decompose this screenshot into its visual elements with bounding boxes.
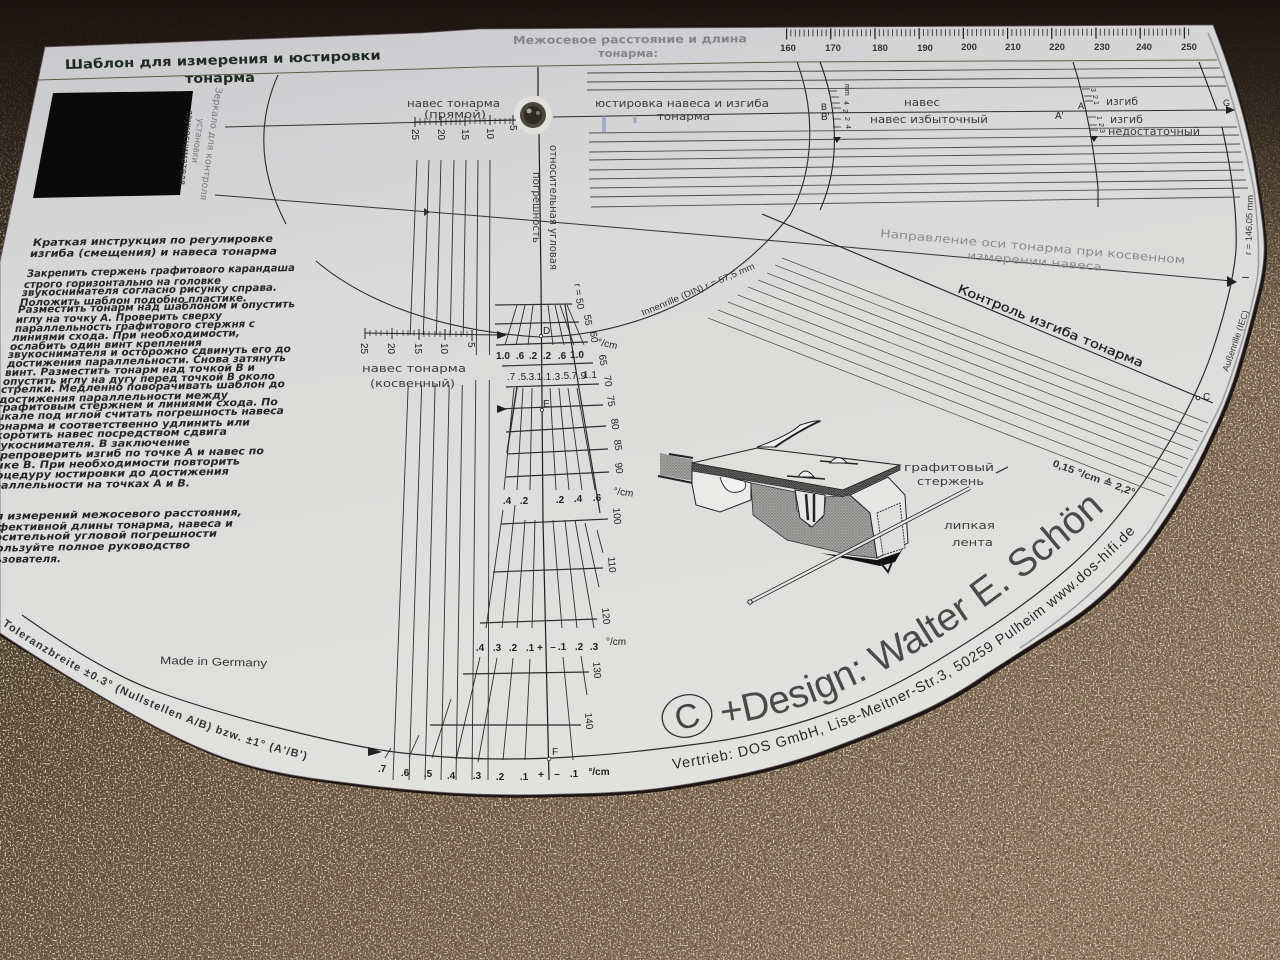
point labels and tick marks: B and A: A' [1055,111,1064,122]
point labels and tick marks: B and A: G [1223,98,1230,108]
instruction text: adjustment procedure: Положить шаблон подобно пластике. [20,292,247,309]
central scale: error values: .4 [476,643,485,654]
central scale: error rays [385,305,603,762]
direct overhang scale [407,98,518,141]
top ruler: 180 [872,43,888,54]
instruction text: adjustment procedure: шкале под иглой считать погрешность навеса [0,406,284,423]
central scale: error values: .3 [552,372,561,383]
point labels and tick marks: B and A: A [1078,101,1084,111]
deviation diagonal line with arrow [215,195,1237,287]
label: axis direction: измерении навеса [967,249,1102,274]
ink marks [604,116,635,132]
central scale: error values: – [550,642,556,653]
instruction heading: Краткая инструкция по регулировке [33,234,273,249]
bottom scale values: .1 [520,772,529,783]
main reference line with arrow G [225,106,1235,127]
instruction text: adjustment procedure [0,262,295,492]
mirror vertical caption: звукоснимателя [176,110,195,185]
central scale: error values: .1 [558,642,567,653]
point labels and tick marks: B and A: 2 [1091,95,1098,99]
label: sticky tape: лента [952,537,993,549]
instruction text: adjustment procedure: параллельность графитового стержня с [15,318,255,335]
angular error vertical label [530,145,559,270]
instruction text: adjustment procedure: графитовым стержнем и линиями схода. По [0,396,278,414]
tolerance curved text: Toleranzbreite ±0.3° (Nullstellen A/B) bzw. ±1° (A'/B') [4,618,306,762]
design credit: C [670,695,704,738]
direct overhang scale: 15 [459,129,470,141]
point labels and tick marks: B and A: mm [843,84,850,96]
mirror vertical caption: Зеркало для контроля [197,87,224,201]
instruction text: adjustment procedure: опустить иглу на дугу перед точкой В около [3,371,275,388]
mirror vertical caption [176,87,224,201]
instruction text: adjustment procedure: Закрепить стержень графитового карандаша [27,262,295,280]
indirect overhang scale: 10 [438,343,449,355]
top ruler: 230 [1094,42,1110,53]
central scale: radial arcs [430,304,609,725]
groove radius labels: I [1241,276,1252,279]
distributor curved text: Vertrieb: DOS GmbH, Lise-Meitner-Str.3, 50259 Pulheim www.dos-hifi.de [672,528,1134,768]
top ruler: 160 [780,43,796,54]
direct overhang scale: навес тонарма [407,98,500,110]
title: Шаблон для измерения и юстировки [65,49,381,73]
points D, E and F: D [543,326,550,337]
instruction text: adjustment procedure: достижения параллельности. Снова затянуть [6,353,286,370]
label: sticky tape: липкая [944,520,995,532]
indirect overhang scale: навес тонарма [362,363,466,375]
labels: overhang and bending: навес [904,97,940,109]
instruction text: adjustment procedure: стрелки. Медленно поворачивать шаблон до [1,378,285,396]
central scale: error values: .1 [526,643,535,654]
central scale: radius labels [571,283,634,730]
instruction text: adjustment procedure: звукоснимателя согласно рисунку справа. [21,283,277,299]
instruction text: adjustment procedure: линиями схода. При необходимости, [12,327,240,344]
central scale: error values: .2 [556,495,565,506]
central scale: radius labels: 60 [587,331,600,344]
central scale: error values: 1.1 [583,370,597,381]
indirect overhang scale: 5 [465,342,476,348]
indirect overhang scale: 20 [385,343,396,355]
instruction text: adjustment procedure: ослабить один винт крепления [10,337,202,353]
instruction text: adjustment procedure: строго горизонтально на головке [24,276,221,291]
label: sticky tape [944,520,995,549]
groove radius labels: Außenrille (IEC) [1220,309,1251,373]
central scale: radius labels: °/cm [613,486,634,500]
labels: overhang and bending: юстировка навеса и изгиба [595,98,769,110]
central scale: error values: .3 [590,642,599,653]
made in Germany: Made in Germany [160,655,268,670]
central scale: error values: .2 [520,496,529,507]
large inner groove circle arcs [264,62,810,337]
instruction text: adjustment procedure: Разместить тонарм над шаблоном и опустить [18,298,295,316]
points D, E and F: F [552,747,558,758]
label: graphite rod: графитовый [904,462,994,474]
central scale: radius labels: r = 50 [571,283,586,310]
top heading: overhang and length: Межосевое расстояние и длина [513,32,747,47]
arcs: points B, A and G [820,62,1217,210]
top ruler: 250 [1181,42,1197,53]
angular error vertical label: относительная угловая [547,145,559,270]
central scale: error values [476,350,602,654]
central scale: error values: + [537,643,543,654]
indirect overhang scale: 25 [358,343,369,355]
top ruler: 200 [961,42,977,53]
instruction text: further measurements [0,507,242,566]
bottom scale values: .5 [424,769,433,780]
central scale: error values: .5 [561,371,570,382]
central scale: error values: 1.0 [570,350,584,361]
top ruler: 170 [825,43,841,54]
point labels and tick marks: B and A: 1 [1092,101,1099,105]
central scale: error values: .3 [493,643,502,654]
central scale: error values: .7 [507,372,516,383]
groove radius labels: r = 146,05 mm [1243,195,1255,255]
central scale: radius labels: 110 [605,556,617,574]
point labels and tick marks: B and A: 2 [843,117,850,121]
instruction heading [30,234,277,260]
indirect overhang scale: 15 [412,343,423,355]
central scale: error values: .4 [574,494,583,505]
points D, E and F: E [543,399,550,410]
central scale: radius labels: 65 [596,354,609,367]
cartridge illustration [658,421,970,604]
central scale: radius labels: 55 [581,314,594,327]
central axis line [538,67,549,780]
direct overhang scale: 10 [484,128,495,140]
point labels and tick marks: B and A: 4 [844,125,851,129]
point labels and tick marks: B and A: 3 [1098,129,1105,133]
central scale: radius labels: 70 [601,375,614,388]
point labels and tick marks: B and A: 2 [841,109,848,113]
central scale: error values: .1 [543,372,552,383]
mounting hole [514,96,552,134]
instruction text: adjustment procedure: винт. Разместить тонарм над точкой В и [5,363,255,379]
label: graphite rod [904,462,1008,488]
labels: overhang and bending: недостаточный [1108,126,1200,138]
title [65,49,381,87]
instruction text: adjustment procedure: звукоснимателя и осторожно сдвинуть его до [7,344,291,361]
label: axis direction: Направление оси тонарма при косвенном [880,227,1186,267]
central scale: error values: .6 [593,493,602,504]
instruction text: adjustment procedure: достижения параллельности между [0,390,228,406]
point labels and tick marks: B and A [821,84,1230,143]
bottom scale values: .3 [473,771,482,782]
direct overhang scale: 20 [435,129,446,141]
central scale: error values: .9 [578,371,587,382]
top ruler: 220 [1049,42,1065,53]
top ruler: 240 [1136,42,1152,53]
bend tolerance label: 0,15 °/cm ≙ 2,2° [1051,458,1137,499]
outer groove arc [22,127,1236,759]
point labels and tick marks: B and A: B' [821,112,830,123]
point labels and tick marks: B and A: 2 [1097,123,1104,127]
bottom scale values: .2 [496,772,505,783]
central scale: radius labels: 75 [604,395,617,408]
point labels and tick marks: B and A: 3 [1089,88,1096,92]
bend check fan lines [708,214,1213,496]
top heading: overhang and length [513,32,747,60]
top ruler: 190 [917,43,933,54]
mirror square [33,91,193,198]
instruction text: adjustment procedure: иглу на точку А. Проверить сверху [16,311,222,326]
indirect overhang scale: (косвенный) [370,378,455,390]
label: axis direction [880,227,1186,274]
bottom scale values: .6 [401,768,410,779]
central scale: error values: .1 [534,372,543,383]
central scale: error values: .6 [516,351,525,362]
central scale: error values: .5 [518,372,527,383]
direct overhang scale: 5 [507,125,518,131]
angular error vertical label: погрешность [530,172,542,243]
bottom scale values: .1 [570,769,579,780]
groove radius labels: Innenrille (DIN) r = 57,5 mm [640,261,756,318]
direct overhang scale: (прямой) [424,109,486,121]
central scale: error values: 1.0 [496,351,510,362]
central scale: radius labels: 130 [590,661,602,679]
card: inner rim line [1020,33,1259,648]
labels: overhang and bending: тонарма [657,111,710,123]
point labels and tick marks: B and A: 1 [1095,116,1102,120]
top ruler [780,32,1197,54]
point labels and tick marks: B and A: 4 [842,101,849,105]
indirect overhang scale [358,328,507,390]
point C [1196,392,1210,403]
labels: overhang and bending: навес избыточный [870,114,988,126]
top heading: overhang and length: тонарма: [598,47,658,60]
point C: C [1203,392,1210,403]
central scale: error values: .2 [529,351,538,362]
points D, E and F [497,326,558,761]
label: graphite rod: стержень [917,476,984,488]
central scale: radius labels: °/cm [596,337,618,352]
mirror vertical caption: установки [189,118,206,164]
central scale: radius labels: 90 [612,462,625,475]
central scale: error values: .2 [575,642,584,653]
labels: overhang and bending: изгиб [1110,114,1143,126]
bottom scale values: + [538,770,544,781]
side overhang parallel lines [393,160,490,780]
title: тонарма [185,71,255,87]
central scale: radius labels: 100 [610,507,622,525]
label: arm bend check: Контроль изгиба тонарма [956,282,1145,370]
central scale: radius labels: 120 [599,607,611,625]
groove radius labels [640,195,1255,373]
central scale: error values: .7 [569,371,578,382]
bottom scale values: °/cm [588,767,610,778]
central scale: radius labels: 80 [608,418,621,431]
top ruler: 210 [1005,42,1021,53]
card: shadow [0,28,1267,798]
labels: overhang and bending: изгиб [1106,96,1138,108]
central scale: error values: .2 [543,351,552,362]
point labels and tick marks: B and A: B [821,102,827,112]
central scale: radius labels: 85 [611,439,624,452]
bottom scale values [378,764,610,783]
instruction heading: изгиба (смещения) и навеса тонарма [30,245,277,260]
bottom scale values: .4 [447,771,456,782]
central scale: radius labels: °/cm [606,637,626,648]
bottom scale values: – [554,769,560,780]
central scale: error values: .3 [526,372,535,383]
design credit: +Design: Walter E. Schön [722,498,1104,721]
card: template sheet [0,25,1264,795]
central scale: radius labels: 140 [582,712,594,730]
labels: overhang and bending [595,96,1200,138]
central scale: error values: .2 [509,643,518,654]
bottom scale values: .7 [378,764,387,775]
horizontal measuring lines [587,68,1248,207]
direct overhang scale: 25 [409,129,420,141]
central scale: error values: .4 [503,496,512,507]
central scale: error values: .6 [558,351,567,362]
outer groove arrow [368,747,382,756]
